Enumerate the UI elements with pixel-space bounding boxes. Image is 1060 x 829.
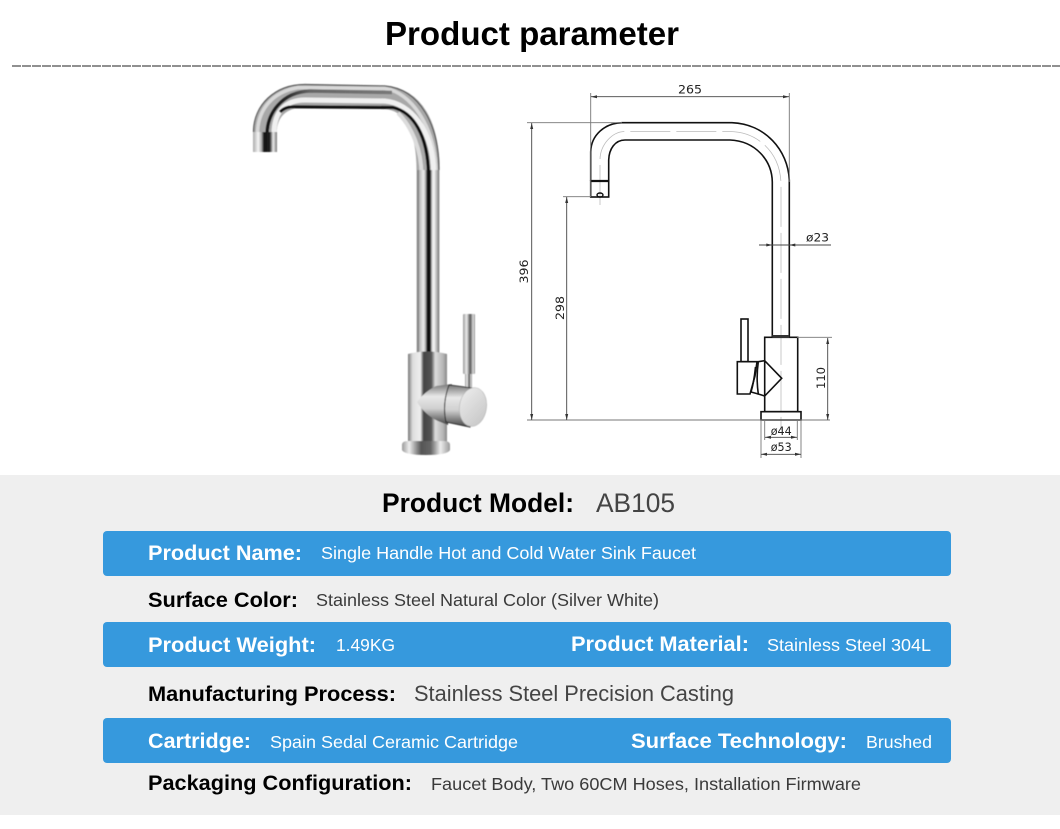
row: packaging configuration: Faucet Body, Two 60CM Hoses, Installation Firmware (431, 774, 861, 794)
dimension diameter 44 (765, 420, 797, 440)
technical drawing (517, 82, 832, 458)
title: Product parameter (385, 15, 679, 52)
spout nozzle (253, 132, 277, 152)
riser highlight (418, 170, 439, 354)
bar: product name (103, 531, 951, 576)
panel: specifications (0, 475, 1060, 815)
bar: weight and material: Product Weight: (148, 632, 316, 657)
dimension diameter 44: ø44 (771, 424, 792, 438)
lever (463, 314, 475, 390)
dimension 265 (591, 82, 789, 197)
dimension 396 (517, 123, 830, 420)
handle end cap (457, 386, 489, 428)
dimension diameter 23 (759, 231, 831, 246)
bar: weight and material: 1.49KG (336, 635, 395, 655)
bar: cartridge and surface technology: Spain Sedal Ceramic Cartridge (270, 732, 518, 752)
row: surface color: Surface Color: (148, 587, 298, 612)
dimension 110: 110 (814, 367, 828, 389)
dimension 298: 298 (553, 296, 567, 320)
row: manufacturing process: Stainless Steel Precision Casting (414, 681, 734, 706)
product model: AB105 (596, 488, 675, 518)
product model: Product Model: (382, 488, 574, 518)
bar: product name: Single Handle Hot and Cold Water Sink Faucet (321, 543, 696, 563)
bar: cartridge and surface technology: Cartridge: (148, 728, 251, 753)
faucet outline (591, 123, 801, 430)
bar: cartridge and surface technology: Brushed (866, 732, 932, 752)
row: surface color (148, 587, 659, 612)
faucet photo (253, 84, 489, 455)
bar: weight and material: Product Material: (571, 631, 749, 656)
bar: weight and material: Stainless Steel 304L (767, 635, 931, 655)
bar: cartridge and surface technology (103, 718, 951, 763)
dimension diameter 53 (761, 420, 801, 458)
row: manufacturing process (148, 681, 734, 706)
dimension diameter 23: ø23 (806, 231, 829, 245)
faucet body (408, 352, 447, 442)
dimension 265: 265 (678, 82, 702, 96)
dimension 396: 396 (517, 260, 531, 284)
row: packaging configuration: Packaging Configuration: (148, 770, 412, 795)
dimension 298 (553, 197, 591, 420)
dimension diameter 53: ø53 (771, 440, 792, 454)
row: packaging configuration (148, 770, 861, 795)
bar: product name: Product Name: (148, 540, 302, 565)
handle cone (417, 384, 452, 425)
faucet base (402, 441, 450, 455)
spout and riser tube (254, 84, 439, 353)
product model (382, 488, 675, 518)
bar: cartridge and surface technology: Surface Technology: (631, 728, 847, 753)
bar: weight and material (103, 622, 951, 667)
handle cylinder (445, 385, 472, 427)
row: surface color: Stainless Steel Natural Color (Silver White) (316, 590, 659, 610)
row: manufacturing process: Manufacturing Process: (148, 681, 396, 706)
dimension 110 (797, 337, 832, 420)
